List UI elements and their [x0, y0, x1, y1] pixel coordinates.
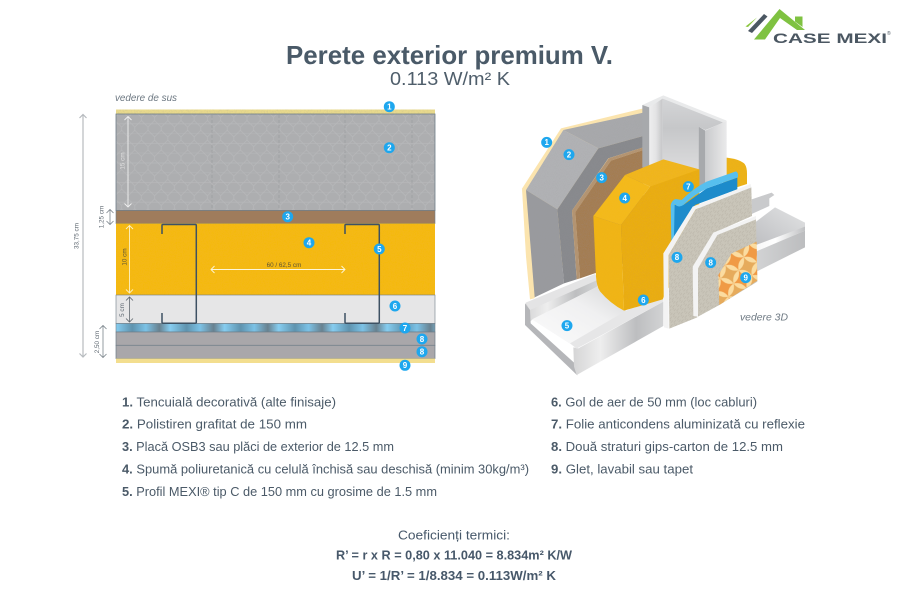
- legend left column: [122, 396, 529, 499]
- legend right column: [551, 396, 805, 476]
- number badges, 3D view: [541, 137, 751, 331]
- layer 3: OSB: [572, 147, 643, 279]
- layer 1: decorative plaster: [116, 110, 435, 114]
- top view label: vedere de sus: [115, 92, 178, 104]
- legend right column: 9. Glet, lavabil sau tapet: [551, 462, 694, 476]
- number badges, top view: [282, 101, 428, 371]
- thermal coefficients: U’ = 1/R’ = 1/8.834 = 0.113W/m² K: [352, 569, 556, 583]
- logo: Case Mexi: [746, 9, 891, 46]
- rail 5: C profile bottom track: [525, 274, 663, 375]
- thermal coefficients: [336, 528, 572, 583]
- subtitle: 0.113 W/m² K: [390, 69, 510, 89]
- C stud vertical: [642, 95, 727, 187]
- number badges, 3D view: 6: [641, 296, 646, 305]
- legend left column: 1. Tencuială decorativă (alte finisaje): [122, 396, 336, 410]
- number badges, top view: 8: [420, 335, 425, 344]
- number badges, top view: 3: [285, 213, 290, 222]
- number badges, top view: 4: [307, 239, 312, 248]
- number badges, top view: 1: [387, 103, 392, 112]
- thermal coefficients: R’ = r x R = 0,80 x 11.040 = 8.834m² K/W: [336, 548, 572, 562]
- 3D view label: vedere 3D: [740, 313, 788, 324]
- number badges, 3D view: 5: [565, 321, 570, 330]
- legend right column: 6. Gol de aer de 50 mm (loc cabluri): [551, 396, 757, 410]
- layer 2: graphite polystyrene: [116, 114, 435, 210]
- legend left column: 4. Spumă poliuretanică cu celulă închisă sau deschisă (minim 30kg/m³): [122, 462, 529, 476]
- dimension: 10 cm: [122, 226, 133, 293]
- dimension: 1,25 cm: [98, 206, 114, 228]
- legend right column: 8. Două straturi gips-carton de 12.5 mm: [551, 440, 783, 454]
- layer 9: finish: [116, 358, 435, 363]
- layer 6: air gap: [116, 295, 435, 324]
- layer 8: inner gypsum board: [693, 216, 757, 317]
- dimension: stud spacing 60 / 62,5 cm: 60 / 62,5 cm: [267, 262, 301, 269]
- layer 4: main foam block: [593, 159, 699, 311]
- logo: Case Mexi: CASE MEXI: [773, 30, 887, 46]
- legend right column: 7. Folie anticondens aluminizată cu reflexie: [551, 418, 805, 432]
- legend left column: 5. Profil MEXI® tip C de 150 mm cu grosime de 1.5 mm: [122, 485, 437, 499]
- number badges, top view: 8: [420, 348, 425, 357]
- dimension: stud spacing 60 / 62,5 cm: [211, 262, 345, 273]
- C profile right: [345, 224, 379, 323]
- number badges, 3D view: 1: [544, 138, 549, 147]
- number badges, 3D view: 8: [708, 258, 713, 267]
- dimension: 5 cm: 5 cm: [119, 303, 126, 317]
- number badges, 3D view: 8: [675, 253, 680, 262]
- number badges, top view: 2: [387, 144, 392, 153]
- layer 7: aluminised foil: [116, 324, 435, 332]
- dimension: 2,50 cm: 2,50 cm: [94, 331, 101, 353]
- layer 7: foil: [671, 171, 738, 241]
- number badges, top view: 9: [403, 361, 408, 370]
- logo: Case Mexi: ®: [887, 30, 891, 37]
- dimension: 15 cm: 15 cm: [120, 152, 126, 170]
- layer 1: plaster: [522, 108, 643, 299]
- number badges, 3D view: 3: [599, 173, 604, 182]
- legend left column: 2. Polistiren grafitat de 150 mm: [122, 418, 307, 432]
- dimension: 2,50 cm: [94, 326, 106, 358]
- dimension: 15 cm: [120, 116, 132, 207]
- layer 2: polystyrene: [526, 113, 643, 297]
- title: Perete exterior premium V.: [286, 40, 613, 70]
- dimension: 5 cm: [119, 297, 133, 322]
- layer 8: gypsum boards: [116, 332, 435, 358]
- dimension: 10 cm: 10 cm: [122, 248, 128, 266]
- panel: 3D cutaway view: [522, 95, 805, 375]
- legend left column: 3. Placă OSB3 sau plăci de exterior de 12.5 mm: [122, 440, 394, 454]
- right rail continuation: [752, 193, 805, 274]
- number badges, 3D view: 2: [567, 150, 572, 159]
- number badges, 3D view: 4: [622, 194, 627, 203]
- dimension: 1,25 cm: 1,25 cm: [98, 206, 106, 228]
- layer 8: outer gypsum board: [663, 184, 752, 329]
- dimension: 33,75 cm: 33,75 cm: [74, 223, 80, 249]
- layer 9: wallpaper finish: [718, 242, 757, 305]
- layer 3: OSB board: [116, 210, 435, 224]
- back foam: [723, 158, 747, 192]
- number badges, 3D view: 9: [743, 273, 748, 282]
- C profile left: [162, 224, 196, 323]
- dimension: 33,75 cm: [74, 114, 86, 357]
- number badges, top view: 6: [393, 302, 398, 311]
- number badges, top view: 7: [403, 324, 408, 333]
- number badges, top view: 5: [377, 245, 382, 254]
- thermal coefficients: Coeficienți termici:: [398, 528, 510, 542]
- panel: top view section: [74, 92, 435, 371]
- layer 4: polyurethane foam: [116, 224, 435, 295]
- number badges, 3D view: 7: [686, 182, 691, 191]
